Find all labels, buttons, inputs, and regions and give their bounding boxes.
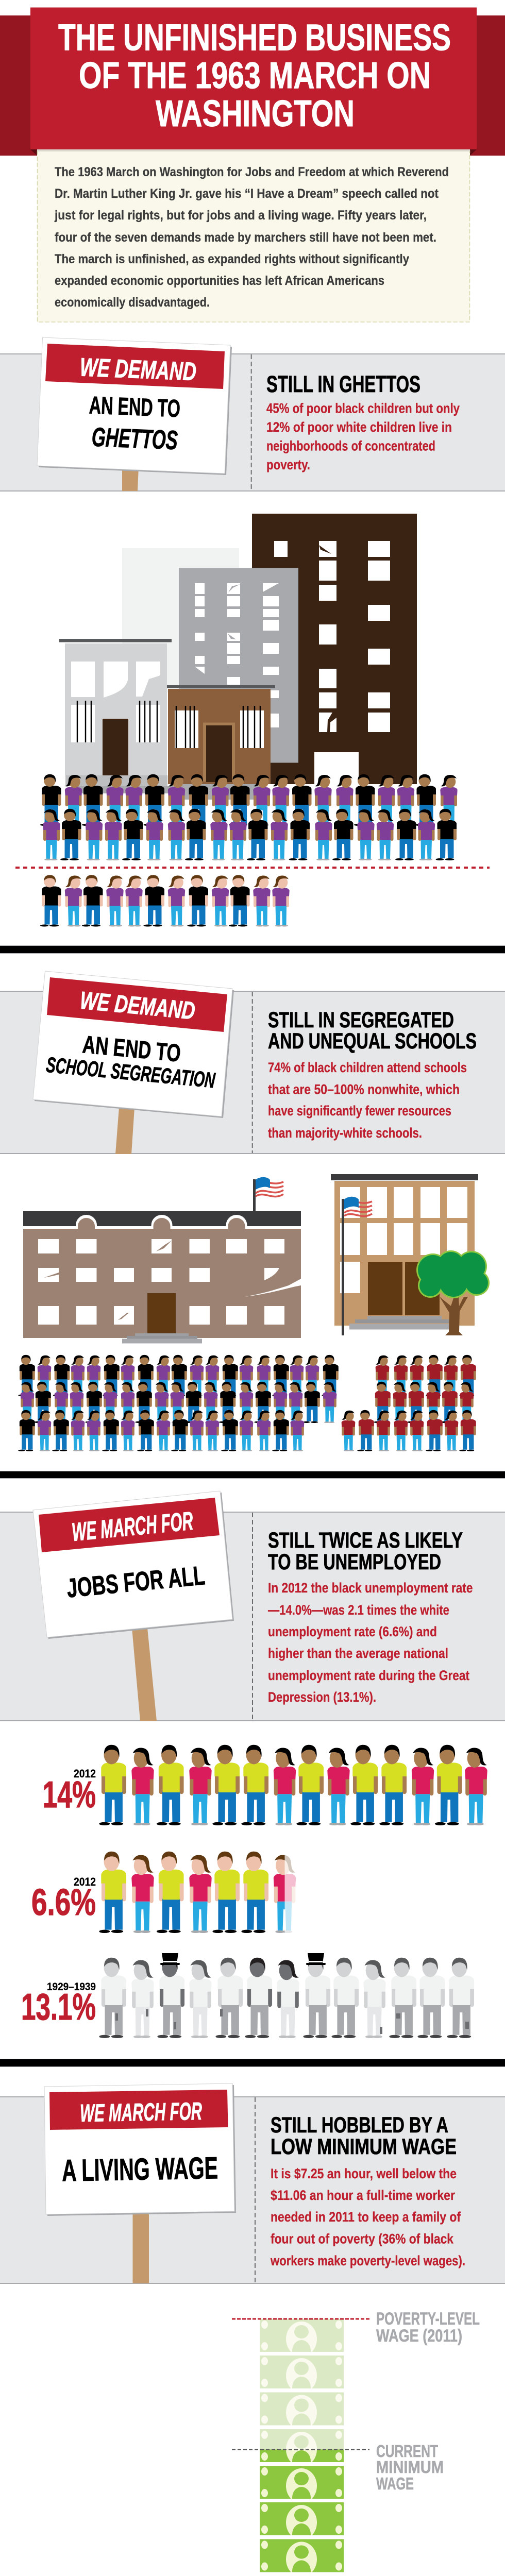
panel: still in ghettos: [0, 337, 505, 492]
protest sign: jobs for all: JOBS FOR ALL: [65, 1561, 206, 1604]
heading and statistic text: poverty.: [266, 457, 310, 472]
protest sign: jobs for all: WE MARCH FOR: [71, 1506, 194, 1547]
heading and statistic text: LOW MINIMUM WAGE: [271, 2134, 457, 2159]
people: white children in poverty: [40, 875, 290, 926]
intro panel: expanded economic opportunities has left African Americans: [55, 274, 384, 288]
protest sign: an end to ghettos: GHETTOS: [91, 422, 178, 455]
protest sign: a living wage: WE MARCH FOR: [80, 2098, 203, 2127]
heading and statistic text: STILL HOBBLED BY A: [271, 2113, 448, 2138]
protest sign: an end to school segregation: [33, 971, 234, 1154]
front row: [43, 809, 457, 860]
back row: [40, 774, 458, 826]
illustration: well-funded school: [331, 1174, 490, 1335]
heading and statistic text: [268, 1528, 473, 1705]
chart row: black unemployment 14%: [42, 1745, 487, 1825]
intro panel: The 1963 March on Washington for Jobs and Freedom at which Reverend: [55, 165, 449, 179]
intro panel: The march is unfinished, as expanded rights without significantly: [55, 252, 409, 266]
chart row: depression unemployment 13.1%: 13.1%: [21, 1987, 96, 2028]
dark brown tower: [252, 514, 417, 784]
current minimum wage marker: MINIMUM: [376, 2458, 444, 2477]
red title block: [30, 7, 477, 149]
poverty-level wage marker: WAGE (2011): [376, 2326, 462, 2346]
poverty-level wage marker: [232, 2309, 480, 2346]
heading and statistic text: than majority-white schools.: [268, 1125, 422, 1141]
ribbon ends: [0, 15, 505, 156]
pale background building: [122, 548, 239, 692]
panel: segregated schools: [0, 971, 505, 1154]
protest sign: an end to school segregation: WE DEMAND: [79, 987, 196, 1025]
protest sign: a living wage: [44, 2083, 236, 2283]
heading and statistic text: $11.06 an hour a full-time worker: [271, 2188, 455, 2203]
brown rowhouse: [167, 685, 275, 800]
heading and statistic text: that are 50–100% nonwhite, which: [268, 1082, 460, 1097]
light grey rowhouse: [59, 639, 175, 793]
chart row: white unemployment 6.6%: [31, 1850, 303, 1937]
chart row: depression unemployment 13.1%: [21, 1953, 474, 2038]
protest sign: an end to school segregation: SCHOOL SEGREGATION: [45, 1053, 217, 1093]
heading and statistic text: Depression (13.1%).: [268, 1689, 376, 1705]
flag: [342, 1197, 372, 1335]
heading and statistic text: [268, 1008, 477, 1141]
heading and statistic text: workers make poverty-level wages).: [270, 2253, 465, 2268]
protest sign: jobs for all: [33, 1491, 234, 1721]
illustration: ghetto buildings: [59, 514, 417, 800]
protest sign: an end to ghettos: WE DEMAND: [79, 352, 197, 386]
current minimum wage marker: [232, 2442, 444, 2493]
heading and statistic text: It is $7.25 an hour, well below the: [271, 2166, 457, 2181]
heading and statistic text: 45% of poor black children but only: [266, 401, 460, 416]
chart row: white unemployment 6.6%: 6.6%: [31, 1882, 96, 1923]
intro panel: Dr. Martin Luther King Jr. gave his “I Have a Dream” speech called not: [55, 187, 439, 201]
heading and statistic text: 12% of poor white children live in: [266, 419, 452, 435]
tree: [416, 1250, 490, 1335]
people: black students in majority-white schools: [342, 1355, 476, 1451]
heading and statistic text: unemployment rate during the Great: [268, 1668, 469, 1683]
protest sign: an end to school segregation: AN END TO: [81, 1031, 182, 1067]
grey tower: [179, 568, 298, 762]
chart row: depression unemployment 13.1%: 1929–1939: [47, 1981, 96, 1993]
heading and statistic text: have significantly fewer resources: [268, 1103, 451, 1118]
heading and statistic text: —14.0%—was 2.1 times the white: [268, 1602, 449, 1618]
intro panel: economically disadvantaged.: [55, 295, 210, 310]
heading and statistic text: In 2012 the black unemployment rate: [268, 1580, 473, 1596]
title text: [58, 18, 451, 134]
heading and statistic text: neighborhoods of concentrated: [266, 438, 435, 453]
heading and statistic text: STILL IN GHETTOS: [266, 371, 420, 397]
title text: WASHINGTON: [156, 93, 355, 134]
heading and statistic text: TO BE UNEMPLOYED: [268, 1550, 441, 1574]
protest sign: an end to ghettos: AN END TO: [89, 392, 181, 423]
heading and statistic text: [270, 2113, 465, 2268]
heading and statistic text: unemployment rate (6.6%) and: [268, 1624, 437, 1639]
heading and statistic text: higher than the average national: [268, 1646, 448, 1661]
current minimum wage marker: CURRENT: [376, 2442, 438, 2461]
panel: minimum wage: [0, 2083, 505, 2284]
intro panel: just for legal rights, but for jobs and a living wage. Fifty years later,: [54, 208, 427, 223]
intro panel: four of the seven demands made by marchers still have not been met.: [55, 230, 436, 245]
panel: unemployment: [0, 1491, 505, 1721]
illustration: underfunded school: [23, 1177, 301, 1344]
chart: stack of dollar bills: [260, 2319, 344, 2576]
protest sign: an end to ghettos: [37, 337, 232, 491]
chart row: black unemployment 14%: 14%: [42, 1774, 96, 1816]
protest sign: a living wage: A LIVING WAGE: [61, 2150, 218, 2188]
current minimum wage marker: WAGE: [376, 2474, 414, 2493]
heading and statistic text: four out of poverty (36% of black: [271, 2231, 454, 2246]
chart row: black unemployment 14%: 2012: [74, 1767, 96, 1780]
heading and statistic text: [266, 371, 460, 472]
chart row: white unemployment 6.6%: 2012: [74, 1875, 96, 1888]
flag: [253, 1177, 283, 1212]
people: black students crowded into nonwhite schools: [18, 1355, 339, 1451]
heading and statistic text: 74% of black children attend schools: [268, 1060, 467, 1075]
title banner: [0, 7, 505, 323]
heading and statistic text: needed in 2011 to keep a family of: [271, 2209, 461, 2225]
intro panel: [37, 149, 470, 323]
people: black children in poverty: [40, 774, 458, 860]
